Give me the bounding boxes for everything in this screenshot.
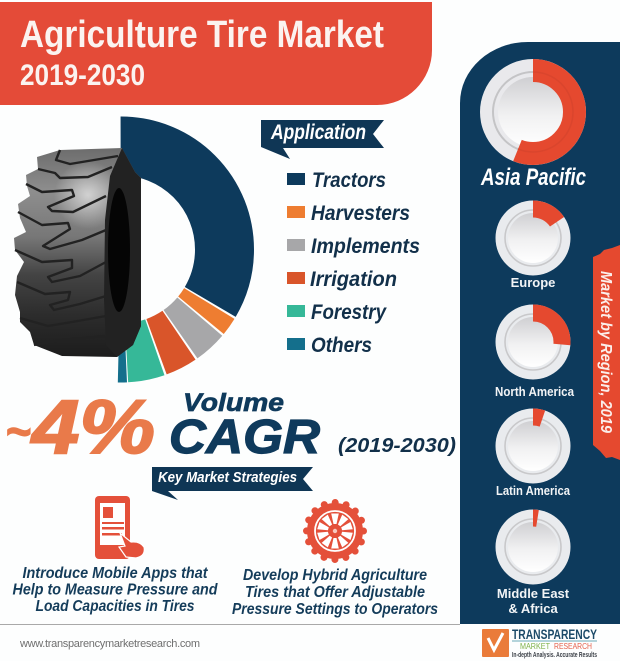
tire photo illustration [14,148,141,357]
label: Latin America: Latin America [496,483,571,498]
title banner: 2019-2030 [20,59,145,92]
CAGR callout: 4% [30,385,155,470]
legend: application segments: Forestry [311,301,387,324]
CAGR callout [5,385,456,470]
logo: transparency market research: RESEARCH [554,642,592,651]
ribbon: key market strategies: Key Market Strategies [158,469,297,486]
gauge: Middle East and Africa [496,510,570,584]
panel: market by region [460,42,620,624]
label: Middle East and Africa [497,586,570,616]
CAGR callout: (2019-2030) [338,435,456,457]
ribbon: application heading: Application [270,121,366,144]
text: strategy two [232,567,438,618]
text: strategy one [12,565,218,615]
icon: mobile phone with tapping hand [95,496,144,559]
label: Middle East and Africa: Middle East [497,586,570,601]
text: strategy two: Tires that Offer Adjustable [245,584,425,601]
CAGR callout: Volume [183,389,284,417]
title banner [0,2,432,105]
legend: application segments: Implements [311,235,420,258]
logo: transparency market research: MARKET [520,642,550,651]
gauge: Asia Pacific [480,59,586,165]
text: strategy one: Help to Measure Pressure and [12,582,218,598]
label: Europe: Europe [511,275,555,290]
gauge: Latin America [496,408,570,484]
title banner: Agriculture Tire Market [20,14,384,56]
ribbon: market by region label: Market by Region, 2019 [597,271,614,433]
donut chart: application share [18,146,224,353]
CAGR callout: ~ [5,403,31,461]
ribbon: market by region label [593,245,620,460]
text: strategy one: Introduce Mobile Apps that [22,565,208,582]
text: strategy two: Develop Hybrid Agriculture [243,567,427,584]
label: Middle East and Africa: & Africa [508,601,558,616]
text: strategy one: Load Capacities in Tires [36,598,195,615]
label: Asia Pacific: Asia Pacific [480,164,586,191]
footer divider [0,624,460,625]
gauge: Europe [496,200,570,276]
text: strategy two: Pressure Settings to Operators [232,601,438,618]
legend: application segments [287,169,420,357]
legend: application segments: Irrigation [310,268,397,291]
footer url: www.transparencymarketresearch.com [19,638,200,650]
CAGR callout: CAGR [169,411,320,464]
legend: application segments: Harvesters [311,202,410,225]
legend: application segments: Others [311,334,372,357]
label: North America: North America [495,384,575,399]
ribbon: key market strategies [152,467,313,500]
gauge: North America [496,304,570,380]
legend: application segments: Tractors [312,169,386,192]
ribbon: application heading [261,120,384,159]
logo: transparency market research [482,626,597,659]
icon: tire wheel [306,502,364,560]
